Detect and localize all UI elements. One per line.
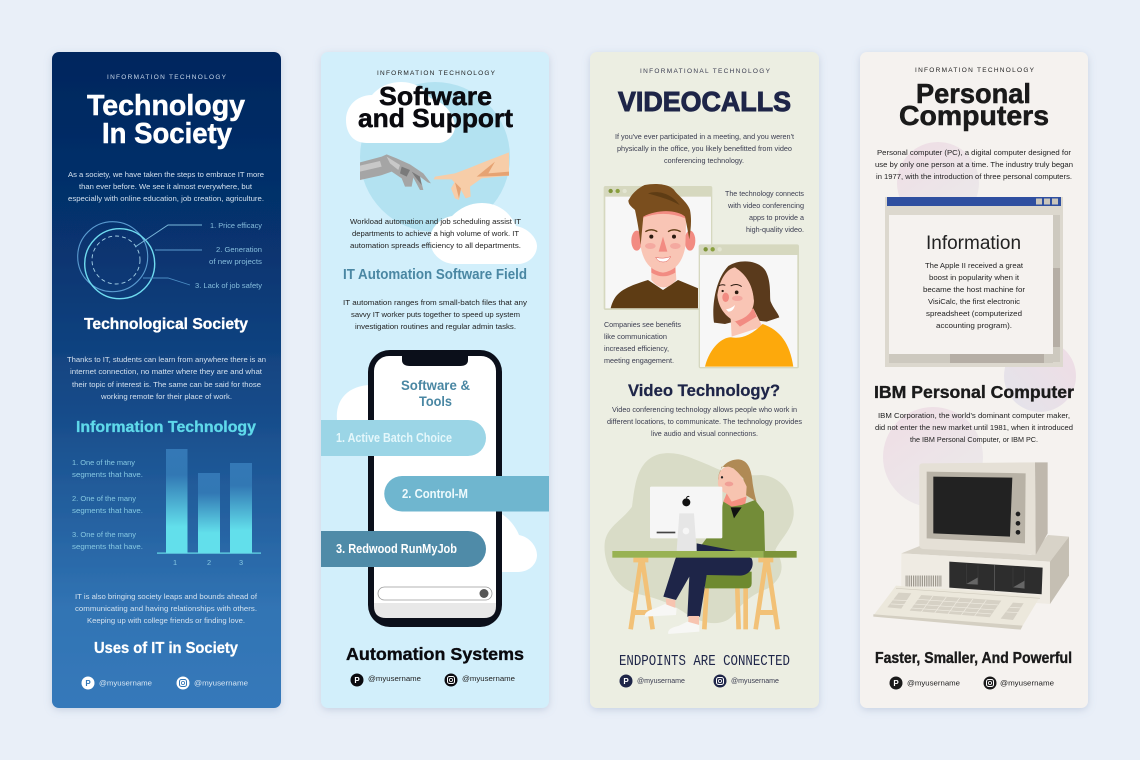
bar chart legend: segments that have.: [72, 542, 143, 551]
diagram labels: 3. Lack of job safety: [195, 281, 262, 290]
title: Software: [379, 81, 492, 111]
background circle: [360, 82, 510, 232]
window text: boost in popularity when it: [929, 273, 1019, 282]
eyebrow label: INFORMATION TECHNOLOGY: [915, 67, 1035, 74]
phone heading: [401, 377, 470, 409]
window heading: Information: [926, 233, 1021, 254]
window text: became the host machine for: [923, 285, 1026, 294]
heading: faster smaller powerful: Faster, Smaller, And Powerful: [875, 650, 1072, 667]
intro text: physically in the office, you likely benefitted from video: [617, 144, 792, 153]
body text: automation spreads efficiency to all departments.: [350, 241, 521, 250]
body text: IT automation ranges from small-batch files that any: [343, 298, 527, 307]
title: In Society: [102, 118, 232, 150]
circle diagram: [78, 222, 202, 299]
diagram labels: of new projects: [209, 257, 262, 266]
phone heading: Software &: [401, 377, 470, 393]
title: [358, 81, 513, 133]
bar chart legend: 1. One of the many: [72, 458, 135, 467]
window text: VisiCalc, the first electronic: [928, 297, 1020, 306]
social handles: [890, 676, 1054, 690]
side text: left: [604, 320, 681, 365]
cloud: left of phone: [337, 385, 372, 420]
intro text: [68, 170, 264, 203]
panel: technology in society: [52, 52, 281, 708]
social handles: @myusername: [194, 678, 248, 688]
cloud: middle: [430, 203, 537, 264]
social handles: [620, 674, 779, 688]
social handles: @myusername: [907, 678, 960, 688]
intro text: [615, 132, 794, 165]
social handles: @myusername: [637, 676, 685, 685]
social handles: @myusername: [99, 678, 152, 688]
pill: redwood: [321, 531, 486, 567]
background circles: [883, 142, 1076, 507]
title: Technology: [87, 90, 245, 122]
heading: video technology: Video Technology?: [628, 381, 780, 400]
closing text: [75, 592, 258, 625]
panel: videocalls: [590, 52, 819, 708]
body text: Thanks to IT, students can learn from anywhere there is an: [67, 355, 266, 364]
body text: live audio and visual connections.: [651, 429, 758, 438]
bar chart: 2: [207, 558, 211, 567]
bar chart: 1: [173, 558, 177, 567]
body text: Video conferencing technology allows people who work in: [612, 405, 797, 414]
phone heading: Tools: [419, 393, 452, 409]
pill: control-m: 2. Control-M: [402, 487, 468, 501]
body text: working remote for their place of work.: [100, 392, 232, 401]
panel: personal computers: [860, 52, 1088, 708]
pill: redwood: 3. Redwood RunMyJob: [336, 542, 457, 556]
intro text: especially with online education, job creation, agriculture.: [68, 194, 264, 203]
video window: man: [604, 184, 712, 310]
body text: their topic of interest is. The same can be said for those: [72, 380, 261, 389]
phone: [368, 350, 502, 627]
diagram labels: [195, 221, 262, 290]
side text: right: apps to provide a: [749, 213, 805, 222]
diagram labels: 1. Price efficacy: [210, 221, 262, 230]
side text: right: with video conferencing: [727, 201, 804, 210]
bar chart legend: [72, 458, 143, 551]
side text: left: Companies see benefits: [604, 320, 681, 329]
side text: right: high-quality video.: [746, 225, 804, 234]
intro text: [875, 148, 1073, 181]
cloud: right of phone: [490, 513, 537, 572]
title: [87, 90, 245, 150]
social handles: [350, 674, 515, 686]
bar chart legend: segments that have.: [72, 470, 143, 479]
intro text: As a society, we have taken the steps to embrace IT more: [68, 170, 264, 179]
illustration: vintage computer: [873, 462, 1069, 630]
retro window: [885, 197, 1063, 367]
window text: The Apple II received a great: [925, 261, 1023, 270]
social handles: P: [354, 676, 360, 685]
social handles: @myusername: [368, 674, 421, 683]
icon: robot and human hands: [360, 152, 509, 200]
illustration: woman at desk: [605, 453, 797, 634]
window text: spreadsheet (computerized: [926, 309, 1022, 318]
intro text: use by only one person at a time. The industry truly began: [875, 160, 1073, 169]
social handles: P: [893, 679, 899, 688]
eyebrow label: INFORMATION TECHNOLOGY: [107, 74, 227, 81]
diagram labels: 2. Generation: [216, 245, 262, 254]
intro text: in 1977, with the introduction of three personal computers.: [876, 172, 1072, 181]
social handles: P: [623, 677, 629, 686]
body text: departments to achieve a high volume of work. IT: [352, 229, 519, 238]
body text: [350, 217, 521, 250]
heading: uses of IT: Uses of IT in Society: [94, 640, 238, 657]
bar chart: [157, 449, 261, 567]
closing text: IT is also bringing society leaps and bounds ahead of: [75, 592, 258, 601]
eyebrow label: INFORMATION TECHNOLOGY: [377, 70, 496, 77]
bar chart legend: 3. One of the many: [72, 530, 136, 539]
side text: left: like communication: [604, 332, 667, 341]
heading: automation field: IT Automation Software Field: [343, 267, 527, 283]
intro text: Personal computer (PC), a digital computer designed for: [877, 148, 1072, 157]
side text: right: [725, 189, 805, 234]
heading: automation systems: Automation Systems: [346, 644, 524, 664]
intro text: conferencing technology.: [664, 156, 744, 165]
body text: [67, 355, 266, 401]
social handles: @myusername: [1000, 678, 1054, 688]
body text: Workload automation and job scheduling assist IT: [350, 217, 521, 226]
bar chart legend: 2. One of the many: [72, 494, 136, 503]
bar chart: 3: [239, 558, 243, 567]
body text: investigation routines and regular admin tasks.: [355, 322, 516, 331]
video window: woman: [699, 244, 799, 368]
eyebrow label: INFORMATIONAL TECHNOLOGY: [640, 68, 771, 75]
body text: the IBM Personal Computer, or IBM PC.: [910, 435, 1038, 444]
body text: did not enter the new market until 1981, when it introduced: [875, 423, 1073, 432]
social handles: [82, 676, 248, 690]
cloud: top: [346, 82, 455, 143]
intro text: than ever before. We see it almost everywhere, but: [79, 182, 252, 191]
body text: [875, 411, 1073, 444]
pill: active batch: 1. Active Batch Choice: [336, 431, 452, 445]
body text: IBM Corporation, the world's dominant computer maker,: [878, 411, 1070, 420]
side text: right: The technology connects: [725, 189, 804, 198]
body text: internet connection, no matter where they are and what: [70, 367, 262, 376]
title: Personal: [916, 78, 1031, 109]
intro text: If you've ever participated in a meeting, and you weren't: [615, 132, 794, 141]
body text: [607, 405, 802, 438]
body text: savvy IT worker puts together to speed up system: [351, 310, 520, 319]
heading: IBM personal computer: IBM Personal Computer: [874, 382, 1074, 402]
closing text: Keeping up with college friends or finding love.: [87, 616, 245, 625]
side text: left: meeting engagement.: [604, 356, 674, 365]
tagline: ENDPOINTS ARE CONNECTED: [619, 654, 790, 670]
closing text: communicating and having relationships with others.: [75, 604, 257, 613]
bar chart legend: segments that have.: [72, 506, 143, 515]
title: VIDEOCALLS: [618, 86, 791, 117]
body text: different locations, to communicate. The technology provides: [607, 417, 802, 426]
side text: left: increased efficiency,: [604, 344, 669, 353]
heading: technological society: Technological Society: [84, 316, 248, 333]
title: Computers: [899, 100, 1049, 131]
window text: accounting program).: [936, 321, 1012, 330]
social handles: @myusername: [731, 676, 779, 685]
window text: [923, 261, 1026, 330]
pill: control-m: [384, 476, 549, 512]
social handles: @myusername: [462, 674, 515, 683]
title: [899, 78, 1049, 131]
body text: [343, 298, 527, 331]
title: and Support: [358, 103, 513, 133]
pill: active batch: [321, 420, 486, 456]
heading: information technology: Information Technology: [76, 419, 256, 436]
panel: software and support: [321, 52, 549, 708]
social handles: P: [85, 679, 91, 688]
